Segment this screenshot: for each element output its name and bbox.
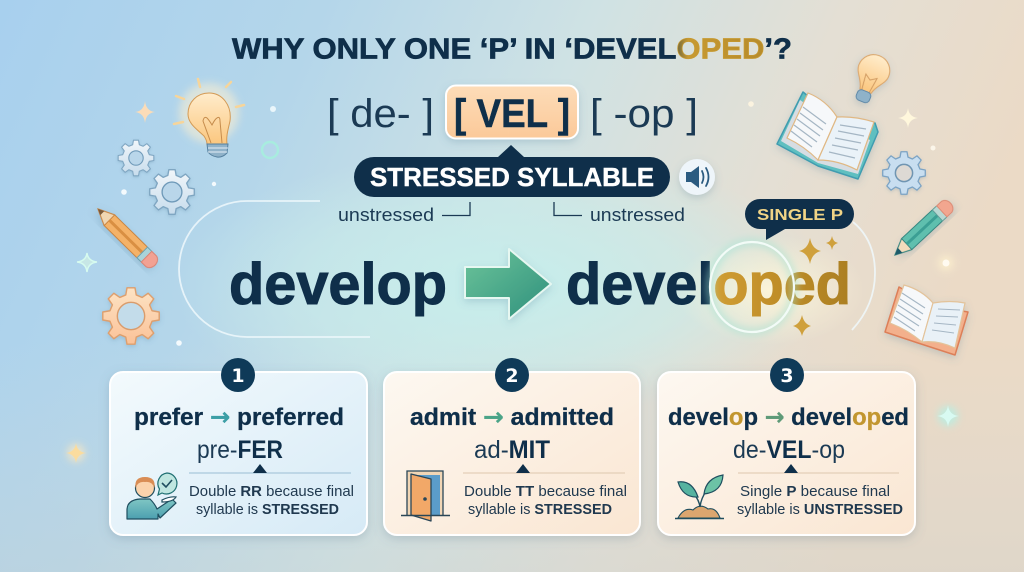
syllables: ad-MIT: ad-MIT <box>474 436 550 464</box>
icon: right pencil <box>890 198 956 260</box>
panel: rule card 1 <box>110 358 367 535</box>
explanation text <box>464 483 627 518</box>
unstressed label left: unstressed <box>338 205 434 225</box>
explanation text: Double TT because final <box>464 483 627 500</box>
callout: single p <box>745 199 854 240</box>
heading: develop to developed: develop → developed <box>668 403 909 431</box>
word: developed: developed <box>566 252 851 317</box>
gold sparkles <box>793 236 838 336</box>
stressed syllable pill <box>354 145 670 197</box>
explanation text: syllable is UNSTRESSED <box>737 501 903 518</box>
explanation text: syllable is STRESSED <box>468 501 612 518</box>
unstressed label left <box>338 202 470 225</box>
icon: person with speech bubble <box>127 473 177 519</box>
explanation text <box>737 483 903 518</box>
explanation text <box>189 483 354 518</box>
icon: small gear 2 <box>150 170 194 214</box>
syllable: op: [ -op ] <box>590 92 698 136</box>
syllable breakdown <box>327 86 698 138</box>
syllable: de: [ de- ] <box>327 92 434 136</box>
gold glow behind ending <box>675 235 865 345</box>
arrow: develop to developed <box>465 249 551 319</box>
badge 3: 3 <box>780 365 794 387</box>
icon: left lightbulb <box>174 79 244 157</box>
highlight circle around p <box>710 242 794 332</box>
explanation text: syllable is STRESSED <box>196 501 339 518</box>
unstressed label right: unstressed <box>590 205 685 225</box>
unstressed label right <box>554 202 685 225</box>
syllable: VEL highlighted: [ VEL ] <box>454 92 570 136</box>
badge 1 <box>221 358 255 392</box>
heading: admit to admitted: admit → admitted <box>410 403 614 431</box>
icon: open door <box>401 471 450 521</box>
icon: small gear 1 <box>118 140 154 176</box>
stress marker <box>189 464 351 473</box>
icon: orange book <box>885 285 968 355</box>
panel: rule card 3 <box>658 358 915 535</box>
icon: right lightbulb <box>847 50 895 107</box>
icon: speaker <box>679 159 715 195</box>
title: WHY ONLY ONE ‘P’ IN ‘DEVEL OPED ’? <box>232 34 792 66</box>
decorative sparkles and dots <box>66 101 959 463</box>
badge 2 <box>495 358 529 392</box>
stress marker <box>738 464 899 473</box>
explanation text: Double RR because final <box>189 483 354 500</box>
stress marker <box>463 464 625 473</box>
heading: prefer to preferred: prefer → preferred <box>134 403 344 431</box>
explanation text: Single P because final <box>740 483 890 500</box>
badge 2: 2 <box>505 365 519 387</box>
syllables: de-VEL-op: de-VEL-op <box>733 436 845 464</box>
icon: orange gear <box>103 288 159 344</box>
stressed syllable pill: STRESSED SYLLABLE <box>370 162 654 192</box>
word: develop: develop <box>229 252 447 317</box>
syllables: pre-FER: pre-FER <box>197 436 283 464</box>
icon: teal book <box>777 92 878 179</box>
icon: right gear <box>883 152 925 194</box>
badge 3 <box>770 358 804 392</box>
panel: rule card 2 <box>384 358 640 535</box>
badge 1: 1 <box>231 365 245 387</box>
icon: sprout <box>675 475 724 518</box>
callout: single p: SINGLE P <box>757 207 843 224</box>
icon: left pencil <box>93 204 160 270</box>
rounded outline frame <box>179 201 875 337</box>
